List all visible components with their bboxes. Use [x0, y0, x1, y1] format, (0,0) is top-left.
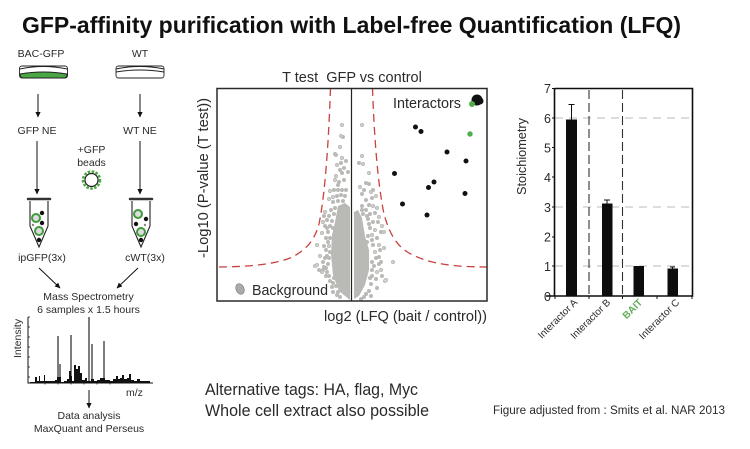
chart: volcano plot: [196, 70, 487, 325]
label: data analysis: Data analysis: [57, 410, 121, 422]
heading: T test: T test GFP vs control: [282, 70, 422, 86]
label: ipGFP: ipGFP(3x): [18, 252, 66, 264]
arrows: tubes to mass spec: [39, 268, 138, 288]
axis label: Stoichiometry: Stoichiometry: [515, 117, 529, 195]
arrow: spectrum to data analysis: [88, 390, 90, 408]
x tick labels: Interactor A: [536, 297, 580, 341]
label: GFP beads: +GFP: [78, 144, 105, 156]
text: notes: Whole cell extract also possible: [205, 402, 429, 420]
y tick labels: [544, 82, 551, 304]
x tick labels: Interactor B: [569, 297, 613, 342]
x tick labels: BAIT: [621, 297, 645, 322]
arrows: extract to tube: [37, 141, 140, 194]
axis label: x: log2 (LFQ (bait / control)): [324, 309, 487, 325]
bars: [566, 120, 678, 296]
panel: workflow: [12, 48, 165, 435]
label: mass spectrometry: 6 samples x 1.5 hours: [37, 304, 140, 316]
label: mass spectrometry: Mass Spectrometry: [43, 291, 134, 303]
text: citation: Figure adjusted from : Smits et al. NAR 2013: [493, 405, 725, 417]
background dense cloud: [331, 203, 369, 300]
y tick labels: 0: [544, 290, 551, 304]
icon: tube cWT: [130, 199, 152, 247]
x tick labels: [536, 297, 682, 342]
text: notes: Alternative tags: HA, flag, Myc: [205, 381, 418, 399]
y tick labels: 7: [544, 82, 551, 96]
chart: mass spectrum: [12, 317, 153, 399]
plot frame: [217, 88, 487, 301]
background protein points: [315, 125, 393, 299]
arrows: dish to nuclear extract: [38, 94, 140, 117]
label: data analysis: MaxQuant and Perseus: [34, 423, 144, 435]
y tick labels: 2: [544, 230, 551, 244]
label: WT: WT: [132, 48, 149, 60]
label: GFP NE: GFP NE: [18, 125, 56, 137]
icon: GFP dish: [20, 66, 68, 78]
chart: stoichiometry bars: [515, 82, 692, 342]
significance threshold curves: [217, 88, 487, 267]
text: notes: [205, 381, 429, 420]
error bars: [568, 104, 675, 268]
x tick labels: Interactor C: [637, 297, 682, 342]
y tick labels: 3: [544, 201, 551, 215]
y tick labels: 1: [544, 260, 551, 274]
label: BAC-GFP: BAC-GFP: [18, 48, 64, 60]
legend: Background: Background: [252, 283, 328, 299]
label: Interactors: Interactors: [393, 96, 461, 112]
interactors: [392, 94, 484, 218]
icon: WT dish: [116, 66, 164, 78]
icon: tube ipGFP: [28, 199, 50, 247]
label: m/z: m/z: [126, 387, 143, 399]
label: cWT: cWT(3x): [125, 252, 165, 264]
icon: GFP bead: [83, 172, 100, 188]
label: WT NE: WT NE: [123, 125, 157, 137]
axes: [546, 88, 692, 296]
center line: [350, 88, 352, 301]
y tick labels: 5: [544, 142, 551, 156]
label: Intensity: Intensity: [12, 318, 24, 358]
y tick labels: 6: [544, 112, 551, 126]
title: GFP-affinity purification with Label-free Quantification (LFQ): [22, 12, 681, 38]
label: GFP beads: beads: [77, 157, 106, 169]
axis label: y: -Log10 (P-value (T test)): [196, 98, 212, 258]
y tick labels: 4: [544, 171, 551, 185]
